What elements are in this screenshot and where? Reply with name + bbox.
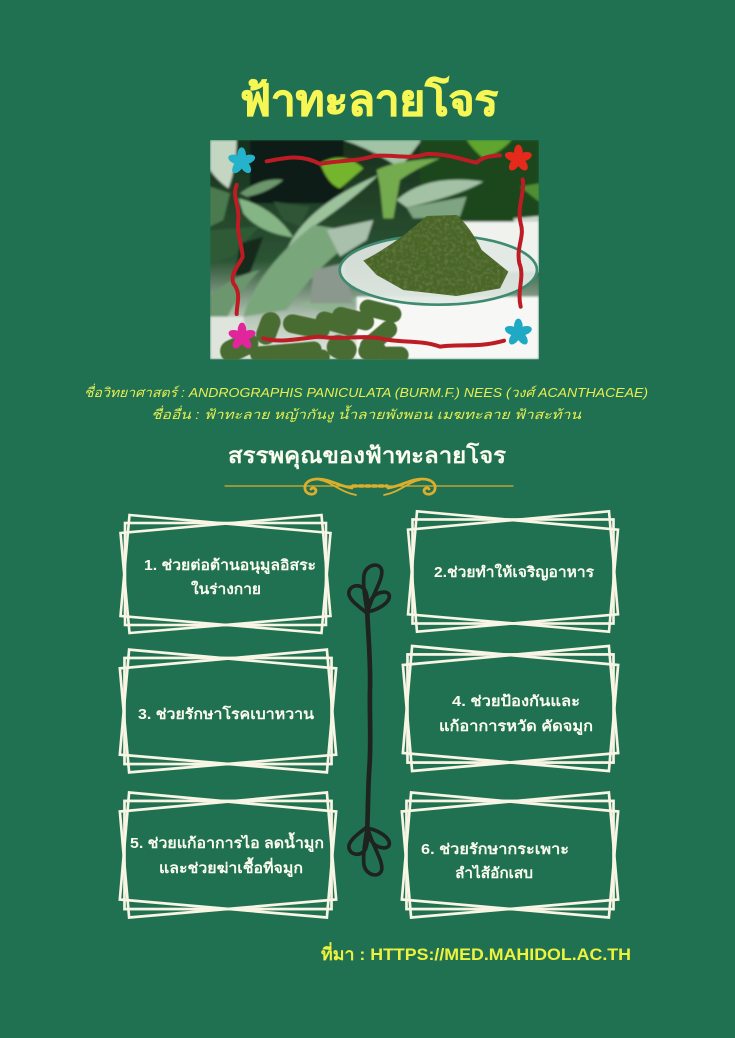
card 6: ลำไส้อักเสบ [455,864,533,882]
card 4 [403,646,618,771]
card 3 [120,650,336,772]
title: ฟ้าทะลายโจร [240,76,498,124]
card 1: 1. ช่วยต่อต้านอนุมูลอิสระ [144,557,316,574]
card 4: 4. ช่วยป้องกันและ [452,693,580,710]
card 6 [402,792,618,918]
gold ornament divider [225,479,513,495]
card 2 [408,511,618,632]
powder pile [363,215,508,296]
vine divider [349,565,389,875]
card 5 [120,792,336,918]
card 3: 3. ช่วยรักษาโรคเบาหวาน [138,705,314,723]
source: ที่มา : HTTPS://MED.MAHIDOL.AC.TH [321,942,631,964]
photo: herb leaves, powder and capsules [210,140,539,369]
capsules [219,298,410,360]
section heading: สรรพคุณของฟ้าทะลายโจร [228,442,506,470]
glass plate [340,235,537,305]
card 1: ในร่างกาย [191,580,261,598]
scientific name: ชื่อวิทยาศาสตร์ : ANDROGRAPHIS PANICULATA (BURM.F.) NEES (วงศ์ ACANTHACEAE) [84,383,648,400]
card 1 [120,515,330,633]
red tinsel border [233,154,523,347]
card 4: แก้อาการหวัด คัดจมูก [439,718,593,735]
other names: ชื่ออื่น : ฟ้าทะลาย หญ้ากันงู น้ำลายพังพอน เมฆทะลาย ฟ้าสะท้าน [151,405,582,423]
flowers [228,147,256,174]
card 2: 2.ช่วยทำให้เจริญอาหาร [434,563,594,581]
card 5: 5. ช่วยแก้อาการไอ ลดน้ำมูก [130,832,324,852]
card 5: และช่วยฆ่าเชื้อที่จมูก [159,857,303,877]
card 6: 6. ช่วยรักษากระเพาะ [421,842,569,858]
